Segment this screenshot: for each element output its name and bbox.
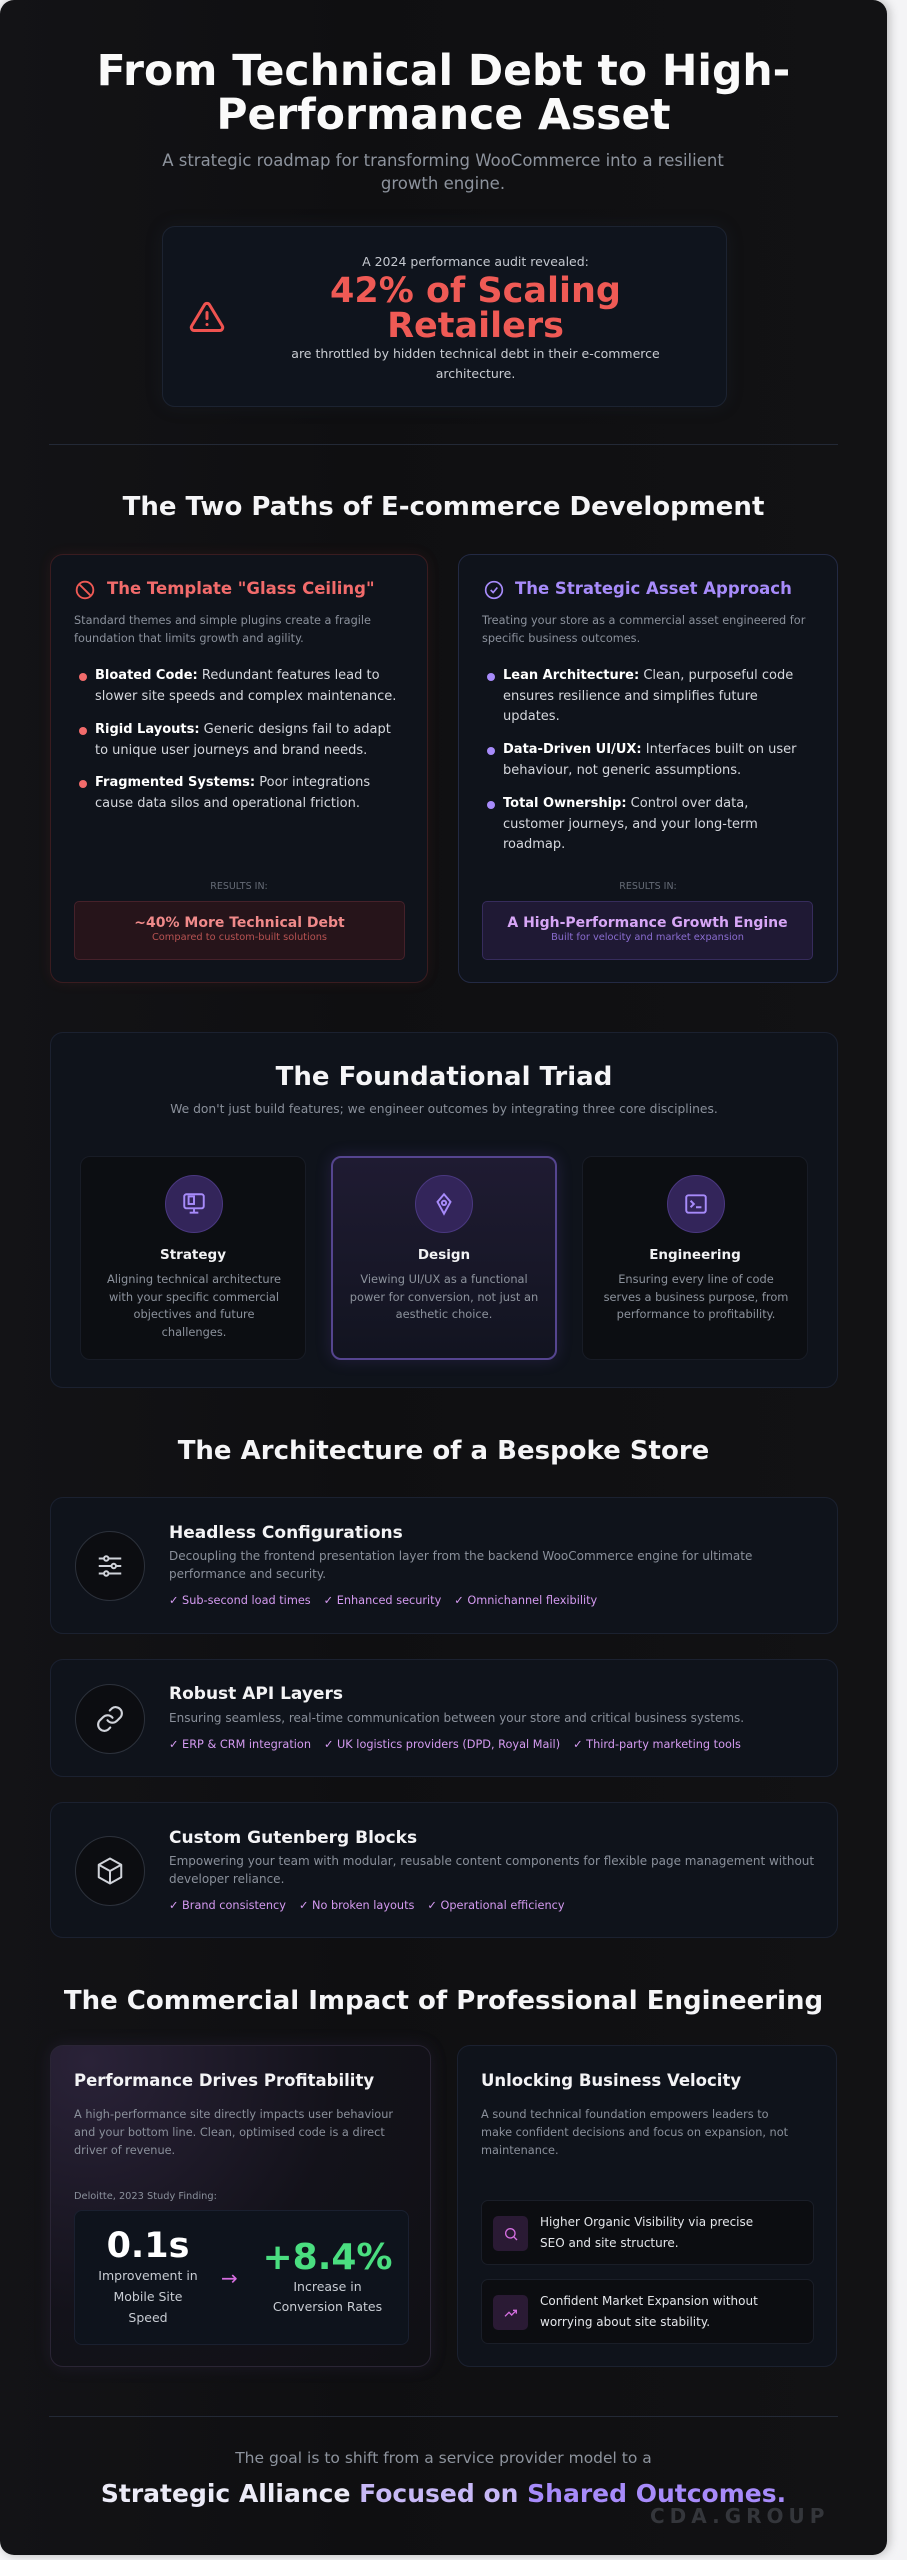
icon: sliders: [75, 1531, 145, 1601]
stat text: [291, 254, 660, 381]
stat text: Retailers: [387, 306, 564, 346]
stat: +8.4%: Conversion Rates: [273, 2299, 382, 2314]
stat: 0.1s: Mobile Site: [114, 2289, 182, 2304]
row: headless configurations: [50, 1497, 838, 1634]
title: [97, 47, 790, 140]
card: strategy: Aligning technical architecture with your specific commercial objectives and future challenges.: [107, 1272, 281, 1338]
icon: design: [415, 1175, 473, 1233]
subtitle: A strategic roadmap for transforming WooCommerce into a resilient growth engine.: [162, 151, 724, 193]
bullet list: [79, 668, 396, 810]
icon: search: [493, 2216, 528, 2251]
result box: A High-Performance Growth Engine: [507, 915, 788, 931]
panel: strategic asset approach: Lean Architecture: Clean, purposeful code ensures resilience and simplifies future updates.: [503, 668, 793, 724]
row: api layers: Robust API Layers: [169, 1684, 343, 1704]
stat: 0.1s: [98, 2226, 198, 2325]
result box: [74, 901, 405, 960]
heading: two paths: The Two Paths of E-commerce Development: [123, 492, 764, 522]
panel: strategic asset approach: [458, 554, 838, 983]
result box: Built for velocity and market expansion: [551, 932, 744, 943]
row: gutenberg blocks: ✓ Brand consistency ✓ No broken layouts ✓ Operational efficiency: [169, 1899, 565, 1912]
footer statement: Strategic Alliance Focused on Shared Outcomes.: [101, 2479, 786, 2508]
stat box: [74, 2210, 409, 2345]
row: headless configurations: Decoupling the frontend presentation layer from the backend WooCommerce engine for ultimate performance and security.: [169, 1549, 752, 1580]
stat text: A 2024 performance audit revealed:: [362, 254, 589, 269]
callout: audit stat: [162, 226, 727, 407]
icon: strategy: [165, 1175, 223, 1233]
result box: Compared to custom-built solutions: [152, 932, 327, 943]
panel: business velocity: [457, 2045, 837, 2367]
row: gutenberg blocks: Empowering your team with modular, reusable content components for flexible page management without developer reliance.: [169, 1854, 814, 1886]
stat: 0.1s: Speed: [128, 2310, 168, 2325]
panel: performance drives profitability: [50, 2045, 431, 2367]
stat: 0.1s: Improvement in: [98, 2268, 198, 2283]
panel: template glass ceiling: RESULTS IN:: [210, 881, 268, 892]
panel: performance drives profitability: A high-performance site directly impacts user behaviour and your bottom line. Clean, optimised code is a direct driver of revenue.: [74, 2108, 393, 2157]
card description: Standard themes and simple plugins create a fragile foundation that limits growth and agility.: [74, 614, 371, 645]
panel: business velocity: A sound technical foundation empowers leaders to make confident decisions and focus on expansion, not maintenance.: [481, 2108, 788, 2157]
row: api layers: ✓ ERP & CRM integration ✓ UK logistics providers (DPD, Royal Mail) ✓ Third-party marketing tools: [169, 1738, 741, 1751]
watermark: CDA.GROUP: [650, 2504, 829, 2528]
icon: ban: [76, 580, 94, 600]
item: organic visibility: Higher Organic Visibility via precise SEO and site structure.: [540, 2215, 753, 2250]
card: design: Design: [418, 1247, 470, 1263]
card: strategy: Strategy: [160, 1247, 226, 1263]
panel: strategic asset approach: Data-Driven UI/UX: Interfaces built on user behaviour, not generic assumptions.: [503, 742, 796, 778]
stat: +8.4%: [262, 2237, 392, 2314]
arrow: →: [221, 2266, 238, 2290]
stat text: are throttled by hidden technical debt in their e-commerce architecture.: [291, 346, 660, 381]
heading: architecture: The Architecture of a Bespoke Store: [178, 1436, 709, 1466]
card: design: [331, 1156, 557, 1360]
item: organic visibility: [481, 2200, 814, 2265]
row: api layers: [50, 1659, 838, 1777]
row: api layers: Ensuring seamless, real-time communication between your store and critical business systems.: [169, 1711, 744, 1725]
panel: strategic asset approach: RESULTS IN:: [619, 881, 677, 892]
card title: The Strategic Asset Approach: [515, 579, 792, 598]
row: headless configurations: Headless Configurations: [169, 1523, 403, 1543]
panel: strategic asset approach: Total Ownership: Control over data, customer journeys, and your long-term roadmap.: [503, 796, 758, 852]
icon: cube: [75, 1836, 145, 1906]
card description: Treating your store as a commercial asset engineered for specific business outcomes.: [482, 614, 805, 645]
footer statement: The goal is to shift from a service provider model to a: [235, 2449, 652, 2467]
result box: [482, 901, 813, 960]
title: From Technical Debt to High-: [97, 47, 790, 96]
stat: +8.4%: +8.4%: [262, 2237, 392, 2278]
panel: business velocity: Unlocking Business Velocity: [481, 2071, 741, 2090]
subheading: We don't just build features; we engineer outcomes by integrating three core disciplines.: [170, 1102, 718, 1116]
card: engineering: [582, 1156, 808, 1360]
item: market expansion: [481, 2279, 814, 2344]
card title: The Template "Glass Ceiling": [107, 579, 375, 598]
card: strategy: [80, 1156, 306, 1360]
icon: link: [75, 1684, 145, 1754]
heading: commercial impact: The Commercial Impact of Professional Engineering: [64, 1986, 823, 2016]
bullet list: [487, 668, 796, 852]
stat text: 42% of Scaling: [330, 271, 621, 311]
footer statement: [101, 2449, 786, 2508]
icon: warning: [190, 302, 224, 332]
panel: template glass ceiling: [50, 554, 428, 983]
stat: 0.1s: 0.1s: [107, 2226, 189, 2266]
row: headless configurations: ✓ Sub-second load times ✓ Enhanced security ✓ Omnichannel flexibility: [169, 1594, 597, 1607]
panel: template glass ceiling: Fragmented Systems: Poor integrations cause data silos and operational friction.: [95, 775, 370, 810]
icon: trend: [493, 2295, 528, 2330]
panel: performance drives profitability: Performance Drives Profitability: [74, 2071, 374, 2090]
card: engineering: Ensuring every line of code serves a business purpose, from performance to profitability.: [604, 1272, 788, 1321]
card: engineering: Engineering: [649, 1247, 741, 1263]
heading: The Foundational Triad: [276, 1062, 612, 1092]
icon: terminal: [667, 1175, 725, 1233]
row: gutenberg blocks: Custom Gutenberg Blocks: [169, 1828, 417, 1848]
row: gutenberg blocks: [50, 1802, 838, 1938]
icon: check circle: [484, 580, 504, 600]
panel: performance drives profitability: Deloitte, 2023 Study Finding:: [74, 2191, 217, 2202]
stat: +8.4%: Increase in: [293, 2279, 362, 2294]
panel: foundational triad: [50, 1032, 838, 1388]
item: market expansion: Confident Market Expansion without worrying about site stability.: [540, 2294, 758, 2329]
card: design: Viewing UI/UX as a functional power for conversion, not just an aesthetic choice.: [350, 1272, 538, 1321]
title: Performance Asset: [216, 91, 671, 140]
panel: template glass ceiling: Rigid Layouts: Generic designs fail to adapt to unique user journeys and brand needs.: [95, 722, 391, 758]
result box: ~40% More Technical Debt: [134, 915, 345, 931]
panel: template glass ceiling: Bloated Code: Redundant features lead to slower site speeds and complex maintenance.: [95, 668, 396, 704]
